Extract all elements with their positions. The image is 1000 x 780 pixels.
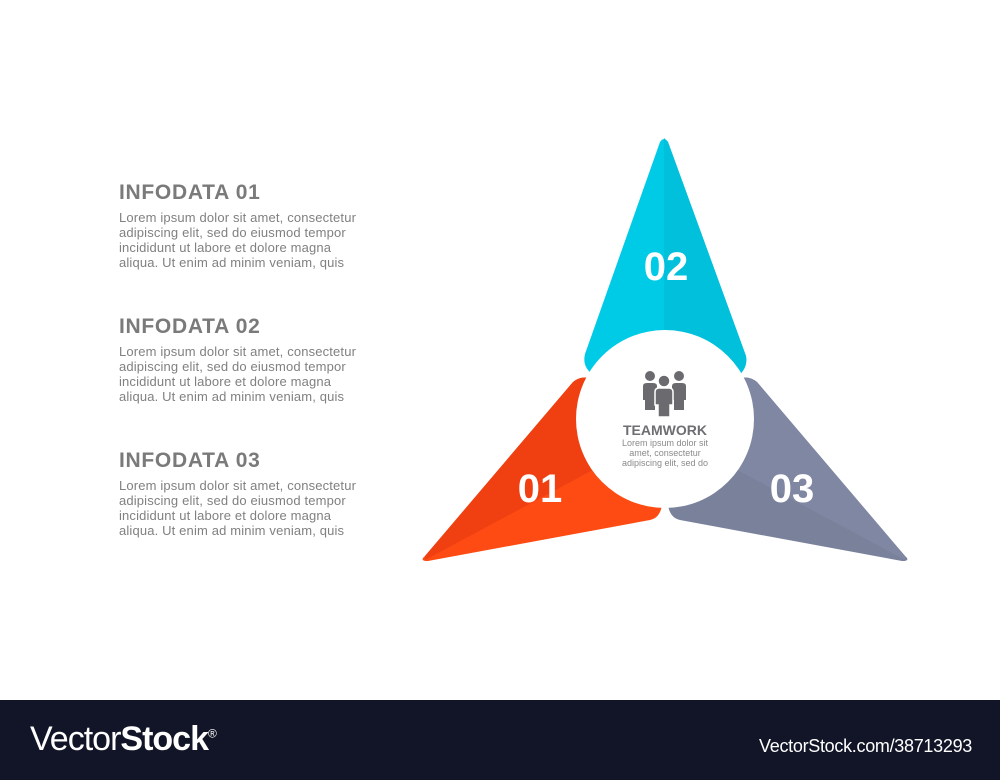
text block: infodata 03: adipiscing elit, sed do eiusmod tempor [119,493,346,508]
footer [0,700,1000,780]
footer url: VectorStock.com/38713293 [759,736,972,756]
center circle: amet, consectetur [629,448,701,458]
text block: infodata 02: adipiscing elit, sed do eiusmod tempor [119,359,346,374]
text block: infodata 02: Lorem ipsum dolor sit amet, consectetur [119,344,356,359]
text block: infodata 01: incididunt ut labore et dolore magna [119,240,331,255]
teamwork label: TEAMWORK [623,422,707,438]
footer logo: VectorStock® [30,720,216,758]
wedge 03 grey: 03 [770,467,814,511]
text block: infodata 01 [119,181,356,270]
text block: infodata 01: adipiscing elit, sed do eiusmod tempor [119,225,346,240]
text block: infodata 03 [119,449,356,538]
text block: infodata 02: aliqua. Ut enim ad minim veniam, quis [119,389,344,404]
wedge 03 grey [668,378,907,561]
wedge 01 orange: 01 [518,467,562,511]
text block: infodata 03: incididunt ut labore et dolore magna [119,508,331,523]
text block: infodata 03: Lorem ipsum dolor sit amet, consectetur [119,478,356,493]
icon: teamwork people [643,371,686,417]
text block: infodata 03: aliqua. Ut enim ad minim veniam, quis [119,523,344,538]
text block: infodata 01: Lorem ipsum dolor sit amet, consectetur [119,210,356,225]
center circle [576,330,754,508]
center circle: Lorem ipsum dolor sit [622,438,709,448]
text block: infodata 01: INFODATA 01 [119,181,260,204]
text block: infodata 02: INFODATA 02 [119,315,260,338]
wedge 02 cyan [584,138,746,376]
wedge 02 cyan: 02 [644,245,688,289]
text block: infodata 03: INFODATA 03 [119,449,260,472]
text block: infodata 02: incididunt ut labore et dolore magna [119,374,331,389]
wedge 01 orange [423,378,662,561]
center circle: adipiscing elit, sed do [622,458,708,468]
text block: infodata 01: aliqua. Ut enim ad minim veniam, quis [119,255,344,270]
text block: infodata 02 [119,315,356,404]
